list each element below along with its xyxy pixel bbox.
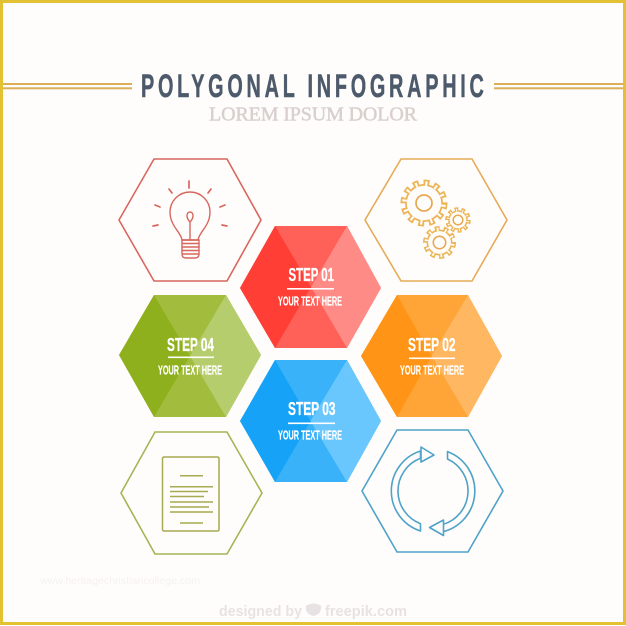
icon: gears [404, 182, 469, 257]
gear medium [425, 228, 454, 257]
step 03 text: YOUR TEXT HERE [278, 428, 342, 442]
step 04 text: YOUR TEXT HERE [158, 362, 222, 378]
step 01 text: YOUR TEXT HERE [278, 294, 342, 308]
header rule right [494, 83, 623, 89]
outline hexagon: document [121, 432, 262, 554]
icon: cycle arrows [391, 447, 475, 536]
faint watermark url: www.heritagechristiancollege.com [39, 575, 200, 587]
step 01 hexagon [240, 226, 381, 348]
icon: freepik logo [306, 604, 321, 616]
header rule left [3, 83, 132, 89]
gear small [447, 209, 469, 231]
step 02 hexagon [361, 295, 502, 417]
freepik credit: freepik.com [325, 603, 407, 620]
freepik credit: designed by [219, 603, 303, 620]
subtitle: LOREM IPSUM DOLOR [209, 104, 418, 126]
step 02 label: STEP 02 [408, 335, 456, 355]
icon: lightbulb [153, 181, 227, 258]
step 04 hexagon [119, 295, 261, 417]
title: POLYGONAL INFOGRAPHIC [141, 68, 484, 104]
gear large [404, 182, 444, 224]
icon: document [162, 457, 219, 531]
outline hexagon: cycle [362, 430, 503, 552]
outline hexagon: lightbulb [119, 159, 261, 281]
freepik credit [219, 603, 407, 620]
outline hexagon: gears [365, 159, 507, 281]
step 04 label: STEP 04 [167, 335, 214, 355]
step 03 hexagon [240, 360, 381, 482]
step 01 label: STEP 01 [288, 265, 334, 285]
step 03 label: STEP 03 [288, 399, 336, 419]
step 02 text: YOUR TEXT HERE [400, 362, 464, 378]
